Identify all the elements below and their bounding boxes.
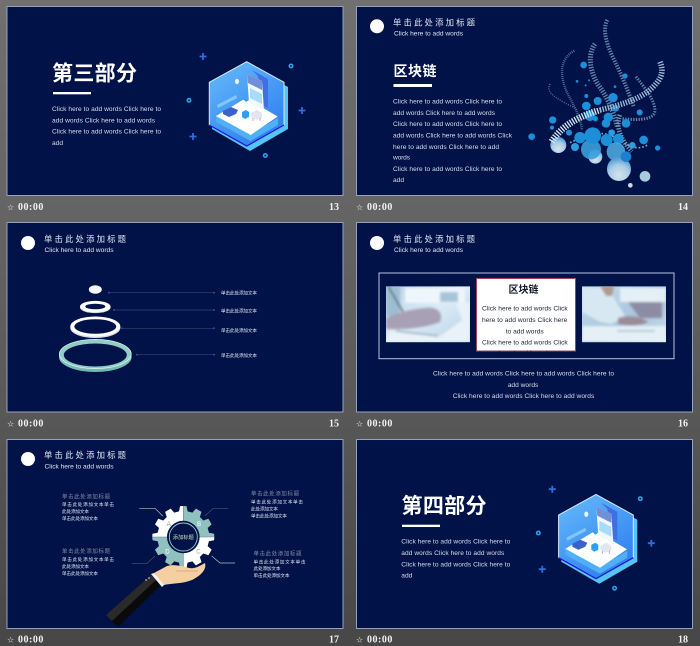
ring labels bbox=[221, 290, 257, 359]
text block: body: add words Click here to add words Click bbox=[393, 132, 513, 140]
card: blockchain: Click here to add words Click bbox=[482, 340, 568, 347]
text block: body bbox=[392, 98, 513, 184]
chart: gear with four quadrants: B bbox=[197, 522, 201, 528]
chart: gear with four quadrants: C bbox=[196, 550, 201, 556]
panel: slide 18 bbox=[356, 440, 692, 628]
icon: title circle bbox=[21, 452, 35, 466]
panel: slide 16 bbox=[356, 222, 692, 412]
text block: body: add words Click here to add words bbox=[401, 550, 505, 557]
text block: top left: 单击此处添加文本单击 bbox=[62, 501, 114, 508]
icon: title circle bbox=[370, 236, 384, 250]
footer: time: 00:00 bbox=[367, 418, 393, 430]
heading underline bbox=[53, 92, 91, 94]
text block: top left bbox=[62, 492, 114, 522]
title: 单击此处添加标题 bbox=[393, 234, 476, 244]
connector lines bbox=[132, 508, 235, 564]
footer: page number: 18 bbox=[678, 634, 688, 646]
slide 16: photos with card bbox=[356, 222, 692, 430]
ring labels: 单击此处添加文本 bbox=[221, 327, 257, 334]
chart art: particle spirals and bubbles bbox=[528, 20, 662, 188]
footer: time: 00:00 bbox=[367, 634, 393, 646]
text block: body: add bbox=[52, 140, 63, 147]
subtitle: Click here to add words bbox=[44, 247, 114, 254]
text block: caption: Click here to add words Click here to add words Click here to bbox=[433, 370, 614, 377]
text block: top right: 单击此处添加标题 bbox=[251, 490, 300, 498]
text block: body: words bbox=[392, 154, 411, 162]
card: blockchain bbox=[476, 278, 576, 357]
panel: slide 14 bbox=[356, 6, 692, 196]
chart: gear with four quadrants bbox=[152, 506, 214, 568]
panel: slide 13 bbox=[7, 6, 343, 196]
card: blockchain: Click here to add words Click bbox=[482, 306, 568, 313]
slide 13: section three bbox=[7, 6, 343, 213]
ring labels: 单击此处添加文本 bbox=[221, 308, 257, 314]
panel: slide 15 bbox=[7, 222, 343, 412]
title: 单击此处添加标题 bbox=[44, 234, 127, 244]
text block: top right: 单击此处添加文本 bbox=[251, 512, 287, 520]
heading underline bbox=[394, 84, 432, 87]
title: 单击此处添加标题 bbox=[44, 450, 127, 460]
ring labels: 单击此处添加文本 bbox=[221, 352, 257, 359]
icon: isometric hexagon illustration bbox=[537, 486, 655, 590]
footer: page number: 15 bbox=[329, 418, 339, 430]
slide 14: blockchain text and particle art bbox=[356, 6, 692, 213]
text block: body: Click here to add words Click here to bbox=[393, 121, 502, 128]
footer: time: ☆ bbox=[356, 203, 363, 212]
heading underline bbox=[402, 525, 440, 527]
chart: gear with four quadrants: A bbox=[167, 522, 171, 528]
chart: gear with four quadrants: D bbox=[165, 550, 170, 556]
card: blockchain: here to add words Click here bbox=[482, 317, 568, 324]
slide 17: gear in hand bbox=[7, 440, 343, 646]
slide 18: section four bbox=[356, 440, 692, 646]
chart: ring stack bbox=[59, 285, 132, 372]
text block: bottom left bbox=[62, 547, 114, 577]
text block: top right: 此处添加文本 bbox=[251, 506, 278, 512]
text block: bottom right: 此处添加文本 bbox=[254, 565, 281, 572]
footer: time: ☆ bbox=[7, 636, 14, 644]
text block: bottom left: 单击此处添加文本 bbox=[62, 570, 98, 577]
text block: bottom left: 单击此处添加标题 bbox=[62, 547, 111, 555]
hand and sleeve bbox=[106, 563, 205, 627]
text block: bottom right: 单击此处添加文本单击 bbox=[254, 558, 306, 566]
text block: bottom right bbox=[254, 550, 306, 579]
slide 15: stacked rings bbox=[7, 222, 343, 430]
text block: body bbox=[401, 539, 511, 580]
text block: bottom left: 单击此处添加文本单击 bbox=[62, 556, 114, 563]
leader lines bbox=[108, 292, 215, 355]
text block: body: Click here to add words Click here to bbox=[393, 98, 502, 106]
footer: time: 00:00 bbox=[367, 202, 393, 213]
footer: page number: 14 bbox=[678, 202, 688, 213]
photo: person at laptop bbox=[582, 286, 666, 342]
footer: page number: 13 bbox=[329, 202, 339, 213]
footer: time: ☆ bbox=[356, 420, 363, 428]
text block: bottom left: 此处添加文本 bbox=[62, 563, 89, 570]
text block: body: Click here to add words Click here to bbox=[401, 539, 511, 546]
card: blockchain: to add words bbox=[506, 328, 544, 335]
panel: slide 17 bbox=[7, 440, 343, 628]
footer: time: 00:00 bbox=[18, 418, 44, 430]
text block: top right: 单击此处添加文本单击 bbox=[251, 498, 303, 506]
subtitle: Click here to add words bbox=[394, 30, 464, 38]
text block: caption: Click here to add words Click here to add words bbox=[453, 393, 595, 400]
text block: caption: add words bbox=[508, 382, 539, 389]
text block: bottom right: 单击此处添加文本 bbox=[254, 572, 290, 579]
icon: title circle bbox=[21, 236, 35, 250]
text block: caption bbox=[433, 370, 614, 400]
text block: body bbox=[52, 106, 161, 147]
subtitle: Click here to add words bbox=[44, 463, 114, 470]
footer: time: 00:00 bbox=[18, 634, 44, 646]
title: 单击此处添加标题 bbox=[393, 18, 476, 28]
subtitle: Click here to add words bbox=[394, 247, 464, 254]
card: blockchain: here to add words bbox=[498, 350, 552, 357]
text block: body: here to add words Click here to add bbox=[393, 144, 499, 151]
chart: gear with four quadrants: 添加标题 bbox=[173, 533, 194, 541]
footer: time: 00:00 bbox=[18, 202, 44, 213]
text block: body: Click here to add words Click here to bbox=[52, 129, 161, 136]
heading: part four: 第四部分 bbox=[402, 495, 486, 518]
ring labels: 单击此处添加文本 bbox=[221, 290, 257, 296]
heading: blockchain: 区块链 bbox=[394, 63, 436, 79]
footer: page number: 17 bbox=[329, 634, 339, 646]
footer: time: ☆ bbox=[7, 203, 14, 212]
icon: isometric hexagon illustration bbox=[187, 53, 306, 157]
text block: top left: 单击此处添加标题 bbox=[62, 492, 111, 500]
footer: time: ☆ bbox=[356, 636, 363, 644]
text block: body: Click here to add words Click here to bbox=[401, 561, 511, 568]
text block: body: add words Click here to add words bbox=[52, 117, 156, 124]
photo: hands typing on laptop bbox=[386, 286, 470, 342]
card: blockchain: 区块链 bbox=[508, 283, 538, 296]
text block: body: add bbox=[393, 177, 404, 184]
text block: top left: 单击此处添加文本 bbox=[62, 515, 98, 522]
text block: top right bbox=[251, 490, 303, 520]
text block: top left: 此处添加文本 bbox=[62, 508, 89, 515]
footer: page number: 16 bbox=[678, 418, 688, 430]
icon: title circle bbox=[370, 19, 384, 33]
text block: body: Click here to add words Click here to bbox=[393, 166, 502, 173]
text block: body: add bbox=[401, 573, 413, 580]
text block: body: Click here to add words Click here to bbox=[52, 106, 161, 113]
footer: time: ☆ bbox=[7, 420, 14, 428]
frame bbox=[379, 273, 674, 359]
heading: part three: 第三部分 bbox=[52, 62, 137, 86]
text block: bottom right: 单击此处添加标题 bbox=[254, 550, 302, 558]
text block: body: add words Click here to add words bbox=[393, 110, 496, 117]
